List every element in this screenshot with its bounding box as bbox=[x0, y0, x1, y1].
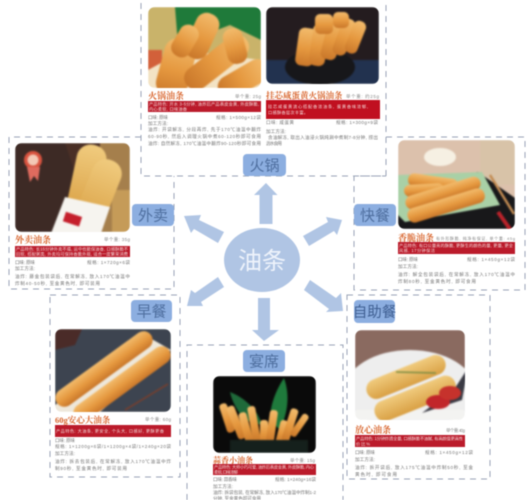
specs text: 油炸: 自然解冻, 170℃油温中翻炸90-120秒即可食用 bbox=[148, 140, 261, 147]
specs text bbox=[15, 259, 130, 287]
specs text: 口味: 原味 bbox=[15, 259, 35, 266]
arrow: down to 宴席 bbox=[252, 298, 279, 341]
specs text: 沥水食用 bbox=[266, 140, 282, 147]
panel: 外卖 bbox=[9, 137, 174, 289]
band: product features: 价比% bbox=[356, 440, 370, 448]
arrow: lower left to 早餐 bbox=[187, 277, 224, 306]
band: product features bbox=[213, 464, 316, 476]
label: 宴席: 宴席 bbox=[249, 352, 279, 370]
band: product features: 口感酥香层次丰富。 bbox=[268, 109, 308, 116]
specs text: 油炸: 拆去包装后, 在常解冻, 放入170℃油温中炸 bbox=[55, 458, 171, 465]
center hub bbox=[184, 183, 343, 341]
label: 火锅: 火锅 bbox=[249, 158, 280, 174]
photo: 蒜香小油条 bbox=[213, 376, 316, 453]
specs text: 加工方法: bbox=[148, 120, 168, 127]
weight: 单个重: 35g bbox=[104, 236, 130, 243]
specs text: 油炸: 解全包装袋后, 在常解冻, 放入170℃油温中 bbox=[398, 271, 515, 278]
specs text bbox=[148, 114, 261, 147]
specs text: 规格: 1×500g×12袋 bbox=[216, 114, 261, 121]
specs text: 加工方法: bbox=[355, 456, 375, 463]
specs text: 黄色时, 即可食用 bbox=[355, 471, 397, 478]
specs text: 口味: 原味 bbox=[55, 437, 75, 444]
band: product features: 回软, 搭配粥类, 外卖均可保持香脆外观, 适合一度繁荣消费 bbox=[16, 250, 128, 258]
photo: 火锅油条 bbox=[147, 6, 262, 89]
arrow: upper right to 快餐 bbox=[303, 217, 342, 246]
weight: 单个重: 约25g bbox=[346, 93, 379, 100]
arrow: up to 火锅 bbox=[254, 183, 278, 224]
specs text: 炸制80秒, 至金黄色时, 即可食用 bbox=[398, 278, 476, 285]
title: 香脆油条: 香脆油条 bbox=[398, 232, 434, 243]
band: product features: 产品特色: 开水 3-5分钟, 油炸后产品表皮金黄, 外皮酥脆, bbox=[149, 100, 259, 108]
band: product features bbox=[55, 425, 171, 437]
center circle: 油条 bbox=[224, 228, 300, 292]
specs text bbox=[398, 256, 515, 285]
title: 蒜香小油条: 蒜香小油条 bbox=[213, 455, 253, 465]
specs text: 加工方法: bbox=[266, 128, 286, 135]
photo: 挂芯咸蛋黄火锅油条 bbox=[266, 7, 379, 85]
specs text bbox=[213, 476, 316, 500]
label: 宴席 bbox=[243, 350, 285, 372]
specs text bbox=[266, 119, 378, 147]
label: 快餐: 快餐 bbox=[360, 208, 390, 224]
icon: award badge bbox=[24, 151, 42, 182]
title: 外卖油条: 外卖油条 bbox=[15, 234, 51, 245]
band: product features: 产品特色: 1分钟炸透全量, 口感酥脆不油腻, 有高颜值更高性 bbox=[356, 435, 463, 442]
weight: 单个重: 15g bbox=[290, 457, 315, 464]
label: 自助餐: 自助餐 bbox=[353, 304, 397, 321]
title: 60g安心大油条: 60g安心大油条 bbox=[55, 415, 111, 425]
specs text: 油炸: 拆开袋后, 放入175℃油温中炸制50秒, 至金 bbox=[355, 464, 473, 471]
specs text: 规格: 1×450g×12袋 bbox=[425, 449, 473, 456]
specs text: 制90秒, 至金黄色时, 即可装用 bbox=[55, 465, 127, 472]
photo: 外卖油条 bbox=[15, 142, 130, 236]
specs text: 加工方法: bbox=[398, 263, 418, 270]
title: 火锅油条: 火锅油条 bbox=[148, 90, 184, 101]
weight: 单个重: 25g bbox=[235, 93, 261, 100]
weight: 单个重: 60g bbox=[145, 416, 171, 423]
band: product features: 风感, 17分钟保活 bbox=[399, 247, 435, 254]
band: product features bbox=[355, 435, 465, 448]
specs text bbox=[355, 449, 473, 478]
band: product features: 产品特色: 有口公量亮的酥脆, 更酥生的颜色的量, 更量, 更全 bbox=[399, 242, 514, 249]
arrow: lower right to 自助餐 bbox=[304, 280, 343, 312]
label: 外卖: 外卖 bbox=[138, 208, 168, 224]
specs text bbox=[55, 437, 171, 472]
specs text: 口味: 蒜香味 bbox=[213, 476, 237, 483]
center circle: 油条: 油条 bbox=[238, 248, 286, 275]
specs text: 口味: 原味 bbox=[355, 449, 375, 456]
specs text: 油炸: 藤金包装袋后, 在常解冻, 放入170℃油温中 bbox=[15, 273, 130, 280]
specs text: 加工方法: bbox=[213, 483, 233, 490]
label: 火锅 bbox=[243, 154, 286, 176]
specs text: 口味: 咸蛋黄 bbox=[266, 119, 294, 126]
specs text: 炸制40-50秒, 至金黄色时, 即可装用 bbox=[15, 280, 100, 287]
band: product features: 挂芯咸蛋黄流心搭配香浓油条, 蛋黄香味浓郁, bbox=[268, 103, 368, 110]
title: 放心油条: 放心油条 bbox=[355, 424, 391, 435]
band: product features: 产品特色: 大师小巧可爱, 油炸后表皮金黄, 外皮酥脆, 内心 bbox=[214, 464, 315, 470]
band: product features bbox=[266, 100, 380, 119]
band: product features: 产品特色: 长15分钟外卖不塌, 运中也能保油香, 口感酥脆不 bbox=[16, 246, 128, 252]
arrow: upper left to 外卖 bbox=[184, 215, 224, 243]
weight and tagline: 有外形酥脆, 纯净有保证, 单个重: 45g bbox=[436, 235, 515, 241]
photo: 60g安心大油条 bbox=[54, 328, 172, 413]
label: 早餐: 早餐 bbox=[136, 304, 167, 320]
weight: 单个重: 40g bbox=[446, 427, 465, 434]
panel: 宴席 bbox=[187, 345, 343, 500]
label: 自助餐 bbox=[353, 300, 397, 323]
specs text: 加工方法: bbox=[55, 450, 75, 457]
specs text: 规格: 1×1200g×6袋/1×1200g×4袋/1×240g×20袋 bbox=[55, 443, 171, 450]
photo: 香脆油条 bbox=[398, 140, 515, 232]
specs text: 含油解冻, 取出入油浸火锅炖涮中煮制7-8分钟, 捞出 bbox=[268, 134, 378, 141]
specs text: 加工方法: bbox=[15, 265, 35, 272]
specs text: 60-90秒, 然后入调理火锅中煮60-120秒即可食用 bbox=[148, 133, 261, 140]
band: product features bbox=[15, 246, 130, 258]
label: 早餐 bbox=[131, 300, 172, 322]
label: 外卖 bbox=[132, 204, 174, 226]
title: 挂芯咸蛋黄火锅油条: 挂芯咸蛋黄火锅油条 bbox=[266, 90, 343, 100]
band: product features: 产品特色: 大油条, 更安全, 个头大, 口感好, 更酥更香 bbox=[56, 428, 165, 434]
band: product features bbox=[398, 242, 515, 254]
band: product features: 柔软, 口味浓郁 bbox=[214, 468, 238, 476]
specs text: 规格: 1×720g×6袋 bbox=[87, 259, 130, 266]
specs text: 规格: 1×240g×16袋 bbox=[275, 476, 316, 483]
photo: 放心油条 bbox=[354, 330, 466, 421]
band: product features bbox=[148, 100, 261, 112]
label: 快餐 bbox=[354, 204, 396, 226]
panel: 火锅 bbox=[141, 3, 386, 176]
specs text: 规格: 1×300g×9袋 bbox=[336, 119, 378, 126]
specs text: 油炸: 开袋解冻, 分段再炸, 先于170℃油温中翻炸 bbox=[148, 126, 261, 133]
specs text: 规格: 1×450g×12袋 bbox=[467, 256, 515, 263]
specs text: 口味: 原味 bbox=[398, 256, 418, 263]
specs text: 油炸: 拆袋包装, 在常解冻, 放入170℃油温中炸制1-2 bbox=[213, 489, 316, 496]
panel: 自助餐 bbox=[345, 295, 490, 479]
band: product features: 内心柔软, 口味油香 bbox=[149, 106, 188, 112]
specs text: 口味: 原味 bbox=[148, 114, 168, 121]
panel: 快餐 bbox=[354, 137, 525, 290]
panel: 早餐 bbox=[50, 295, 180, 477]
